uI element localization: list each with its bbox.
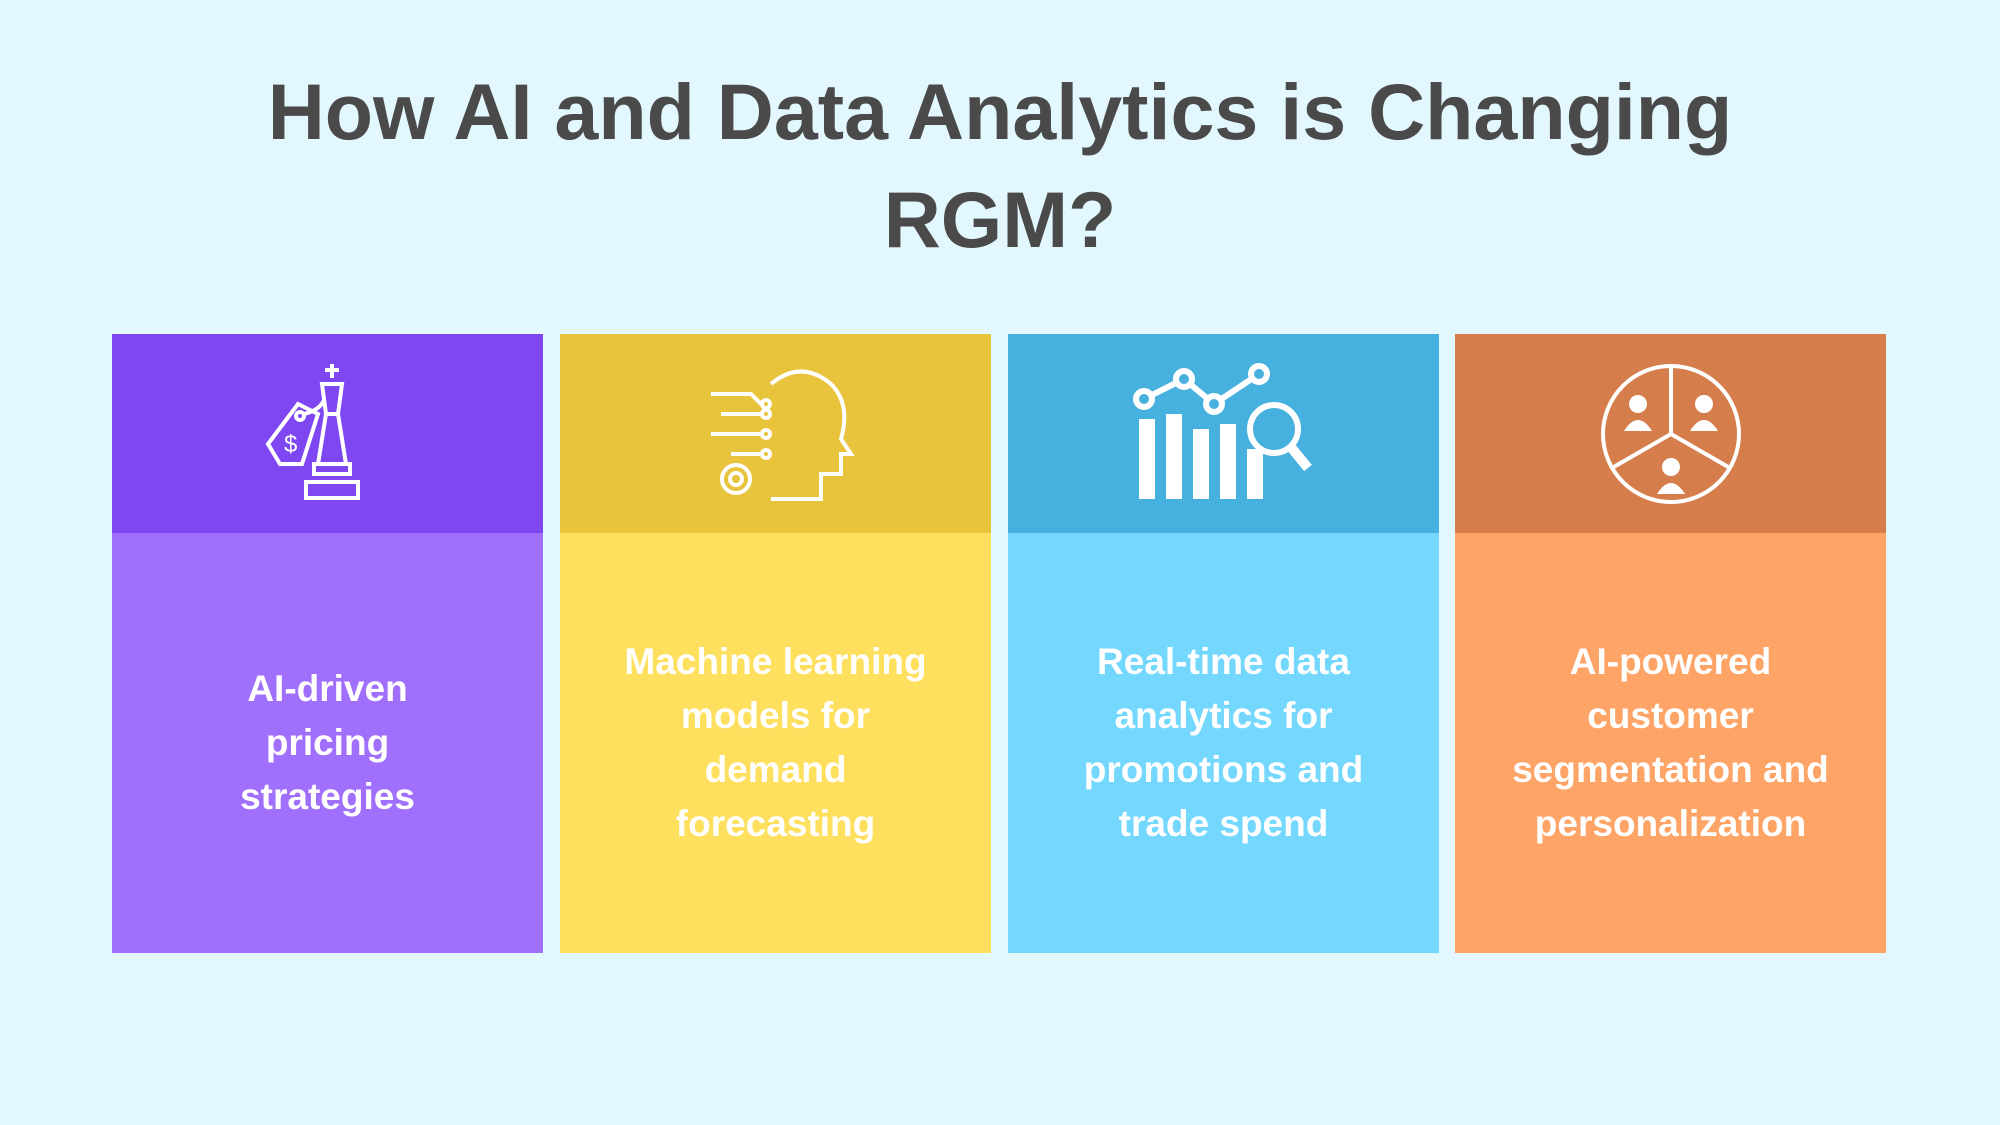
- text: segmentation and: [1512, 749, 1829, 790]
- icon: brain head gears: [560, 334, 991, 533]
- text: Machine learning: [624, 641, 927, 682]
- title: RGM?: [884, 175, 1116, 264]
- text: personalization: [1535, 803, 1806, 844]
- panel: real-time analytics: [1008, 334, 1439, 953]
- text: strategies: [240, 776, 415, 817]
- text: trade spend: [1119, 803, 1328, 844]
- panel: segmentation: [1455, 334, 1886, 953]
- text: models for: [681, 695, 870, 736]
- text: demand: [705, 749, 846, 790]
- icon: chess price tag: $: [284, 430, 297, 458]
- text: AI-driven: [247, 668, 408, 709]
- text: promotions and: [1084, 749, 1363, 790]
- icon: bar chart magnifier: [1008, 334, 1439, 533]
- icon: chess price tag: [112, 334, 543, 533]
- text: pricing: [266, 722, 389, 763]
- title: [268, 67, 1732, 264]
- text: [1008, 533, 1439, 953]
- text: [112, 533, 543, 953]
- panel: machine learning: [560, 334, 991, 953]
- text: [560, 533, 991, 953]
- text: forecasting: [676, 803, 875, 844]
- text: customer: [1587, 695, 1754, 736]
- icon: segmented people circle: [1455, 334, 1886, 533]
- text: Real-time data: [1097, 641, 1350, 682]
- title: How AI and Data Analytics is Changing: [268, 67, 1732, 156]
- text: analytics for: [1114, 695, 1332, 736]
- text: [1455, 533, 1886, 953]
- text: AI-powered: [1570, 641, 1771, 682]
- panel: pricing: [112, 334, 543, 953]
